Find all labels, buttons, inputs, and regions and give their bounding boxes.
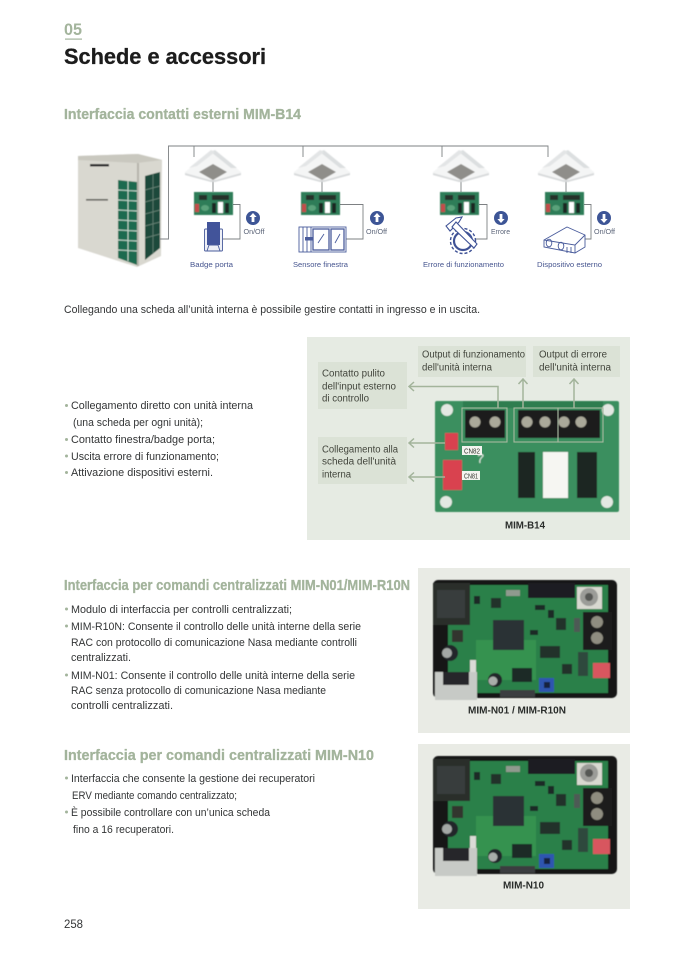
bullet list: MIM-B14 [65,400,254,479]
bullet list: MIM-N10: Interfaccia che consente la gestione dei recuperatori [71,773,315,785]
photo: board [433,580,617,700]
wiring [160,146,591,239]
bullet list: MIM-N10 [65,773,315,836]
section number: 05 [64,20,82,39]
photo: board [433,756,617,876]
arrows [409,379,578,482]
bullet list: MIM-N01/MIM-R10N: controlli centralizzati. [71,700,173,712]
bullet list: MIM-N01/MIM-R10N: MIM-N01: Consente il controllo delle unità interne della serie [71,670,355,682]
heading: MIM-B14: Interfaccia contatti esterni MIM-B14 [64,107,301,123]
icon: window sensor [299,227,346,252]
bullet list: MIM-N10: ERV mediante comando centralizzato; [72,790,237,802]
icon: indoor cassettes [185,150,594,182]
callout: indoor unit link: interna [322,470,351,480]
heading: MIM-N10: Interfaccia per comandi centralizzati MIM-N10 [64,748,374,764]
icon: outdoor unit [78,154,162,267]
caption: badge: Badge porta [190,262,233,269]
icon: up arrow on/off [244,211,265,236]
bullet list: MIM-N01/MIM-R10N: RAC senza protocollo di comunicazione Nasa mediante [71,685,326,697]
icon: hammer and gear [446,217,477,254]
callout: dry contact input: dell'input esterno [322,382,396,392]
bullet list: MIM-B14: (una scheda per ogni unità); [73,417,203,429]
callout: dry contact input [318,362,407,409]
icon: external device [544,227,585,253]
caption: MIM-N01 / MIM-R10N [468,704,566,716]
callout: operation output: Output di funzionamento [422,350,525,360]
bullet list: MIM-N10: fino a 16 recuperatori. [73,824,174,836]
bullet list: MIM-N01/MIM-R10N: centralizzati. [71,652,131,664]
label: CN82 [462,446,482,456]
callout: dry contact input: di controllo [322,394,369,404]
callout: error output [533,346,620,377]
panel: MIM-N10 photo [418,744,630,909]
callout: operation output: dell'unità interna [422,362,492,374]
icon: down arrow error [491,211,510,236]
diagram: connections [78,146,615,269]
page number: 258 [64,917,83,931]
caption: external device: Dispositivo esterno [537,262,602,269]
bullet list: MIM-N01/MIM-R10N: RAC con protocollo di comunicazione Nasa mediante controlli [71,637,357,649]
bullet list: MIM-N01/MIM-R10N: MIM-R10N: Consente il controllo delle unità interne della serie [71,621,361,633]
icon: down arrow error: Errore [491,229,510,236]
callout: indoor unit link [318,437,407,484]
icon: interface boards [194,192,584,215]
bullet list: MIM-B14: Contatto finestra/badge porta; [71,434,215,446]
bullet list: MIM-N10: È possibile controllare con un’unica scheda [71,806,271,819]
label: CN81 [462,471,480,480]
bullet list: MIM-B14: Uscita errore di funzionamento; [71,451,219,463]
label: CN82: CN82 [464,448,480,456]
intro text: Collegando una scheda all’unità interna è possibile gestire contatti in ingresso e in uscita. [64,304,480,316]
caption: window: Sensore finestra [293,262,348,269]
icon: down arrow on/off [594,211,615,236]
caption: MIM-B14: MIM-B14 [505,520,545,532]
callout: indoor unit link: Collegamento alla [322,444,398,456]
bullet list: MIM-B14: Collegamento diretto con unità interna [71,400,254,412]
panel: MIM-N01 / MIM-R10N photo [418,568,630,733]
heading: MIM-N01/MIM-R10N: Interfaccia per comandi centralizzati MIM-N01/MIM-R10N [64,578,410,594]
icon: up arrow on/off window: On/Off [366,229,387,236]
bullet list: MIM-B14: Attivazione dispositivi esterni. [71,467,213,479]
callout: error output: dell'unità interna [539,362,611,374]
icon: up arrow on/off: On/Off [244,229,265,236]
callout: indoor unit link: scheda dell'unità [322,456,396,468]
caption: error: Errore di funzionamento [423,262,504,269]
bullet list: MIM-N01/MIM-R10N [65,604,361,712]
caption: MIM-N10 [503,880,544,892]
bullet list: MIM-N01/MIM-R10N: Modulo di interfaccia per controlli centralizzati; [71,604,292,616]
label: CN81: CN81 [464,474,478,480]
panel: MIM-B14 board [307,337,630,540]
photo: MIM-B14 board [435,401,619,512]
icon: door badge [204,222,222,251]
callout: operation output [418,346,526,377]
title: Schede e accessori [64,44,266,69]
highlight: terminal outlines [462,408,603,442]
callout: error output: Output di errore [539,350,607,360]
icon: down arrow on/off: On/Off [594,229,615,236]
icon: up arrow on/off window [366,211,387,236]
callout: dry contact input: Contatto pulito [322,368,385,380]
